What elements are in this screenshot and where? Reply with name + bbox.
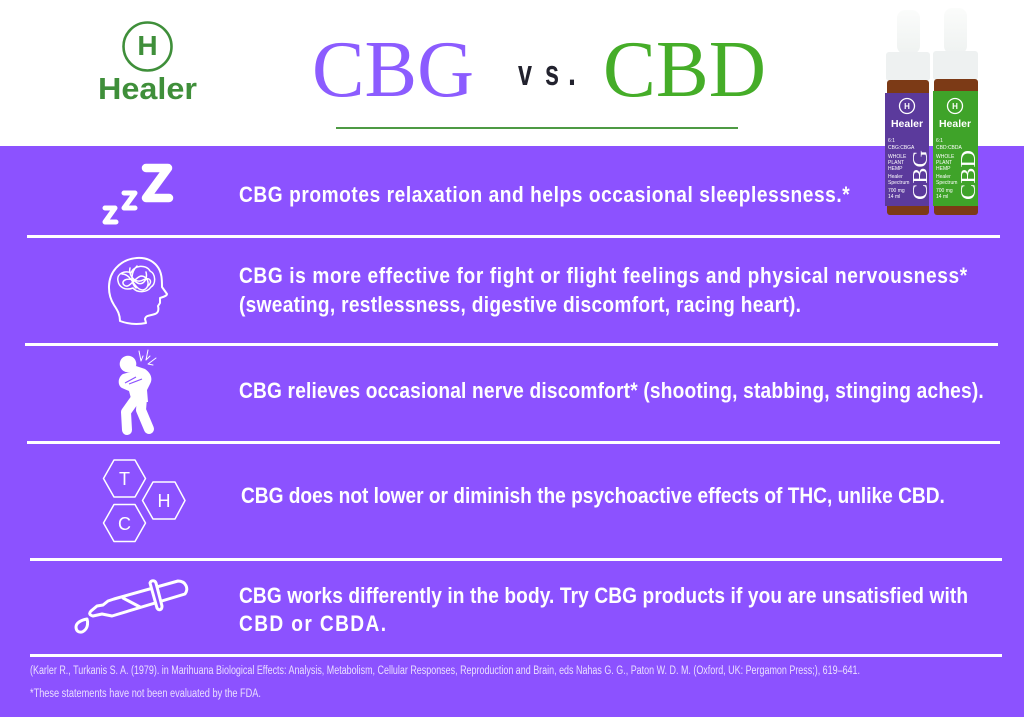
text: works differently: CBD or CBDA.	[239, 612, 386, 636]
product: CBD bottle: 700 mg	[936, 188, 953, 194]
product: CBD bottle: PLANT	[936, 160, 952, 166]
product: CBD bottle: CBD:CBDA	[936, 145, 963, 151]
product: CBD bottle: H	[952, 102, 958, 111]
product: CBG bottle: CBG	[908, 150, 932, 200]
product: CBG bottle: Spectrum	[888, 180, 909, 186]
product: CBG bottle: Healer	[888, 174, 903, 180]
text: sleep benefit: CBG promotes relaxation and helps occasional sleeplessness.*	[239, 183, 850, 207]
logo: Healer: H	[137, 30, 158, 61]
product: CBG bottle: H	[904, 102, 910, 111]
product: CBD bottle: Healer	[936, 174, 951, 180]
title: vs.: .	[568, 52, 576, 93]
product: CBG bottle	[885, 10, 932, 215]
product: CBD bottle: 14 ml	[936, 194, 948, 200]
text: fight or flight benefit: CBG is more effective for fight or flight feelings and physical nervousness*	[239, 264, 967, 288]
product: CBG bottle: PLANT	[888, 160, 904, 166]
title underline	[336, 127, 738, 129]
panel: purple background	[0, 146, 1024, 717]
product: CBD bottle: Spectrum	[936, 180, 957, 186]
product: CBG bottle: HEMP	[888, 166, 903, 172]
product: CBG bottle: Healer	[891, 118, 923, 130]
title: vs.	[518, 52, 576, 93]
product: CBD bottle: HEMP	[936, 166, 951, 172]
product: CBG bottle: CBG:CBGA	[888, 145, 915, 151]
product: CBG bottle: WHOLE	[888, 154, 907, 160]
product: CBG bottle: 700 mg	[888, 188, 905, 194]
text: fight or flight benefit: (sweating, restlessness, digestive discomfort, racing heart).	[239, 293, 801, 317]
text: works differently: CBG works differently in the body. Try CBG products if you are unsatisfied with	[239, 584, 968, 608]
product: CBD bottle: CBD	[956, 150, 980, 200]
title: vs.: s	[545, 53, 559, 93]
text: nerve discomfort benefit: CBG relieves occasional nerve discomfort* (shooting, stabbing, stinging aches).	[239, 379, 984, 403]
icon: THC hexagons: H	[158, 491, 170, 511]
icon: THC hexagons: T	[119, 469, 130, 489]
icon: head with tangled thoughts	[109, 258, 167, 324]
logo: Healer	[98, 22, 197, 106]
icon: person in pain	[119, 350, 156, 430]
icon: THC hexagons	[104, 460, 185, 542]
product: CBG bottle: 6:1	[888, 138, 895, 144]
product: CBG bottle: 14 ml	[888, 194, 900, 200]
footnote: FDA disclaimer: *These statements have not been evaluated by the FDA.	[30, 688, 261, 700]
divider lines	[25, 235, 1002, 657]
title: CBG: CBG	[312, 26, 474, 114]
text: works differently	[239, 584, 968, 636]
product: CBD bottle: Healer	[939, 118, 971, 130]
text: THC comparison: CBG does not lower or diminish the psychoactive effects of THC, unlike CBD.	[241, 484, 945, 508]
icon: THC hexagons: C	[118, 514, 131, 534]
icon: dropper	[76, 581, 187, 632]
product: CBD bottle: WHOLE	[936, 154, 955, 160]
text: fight or flight benefit	[239, 264, 967, 317]
logo: Healer: Healer	[98, 72, 197, 106]
title: CBD: CBD	[603, 26, 766, 114]
icon: sleep zzz	[105, 168, 169, 222]
product: CBD bottle: 6:1	[936, 138, 943, 144]
product: CBD bottle	[933, 8, 980, 215]
title: vs.: v	[518, 53, 533, 93]
